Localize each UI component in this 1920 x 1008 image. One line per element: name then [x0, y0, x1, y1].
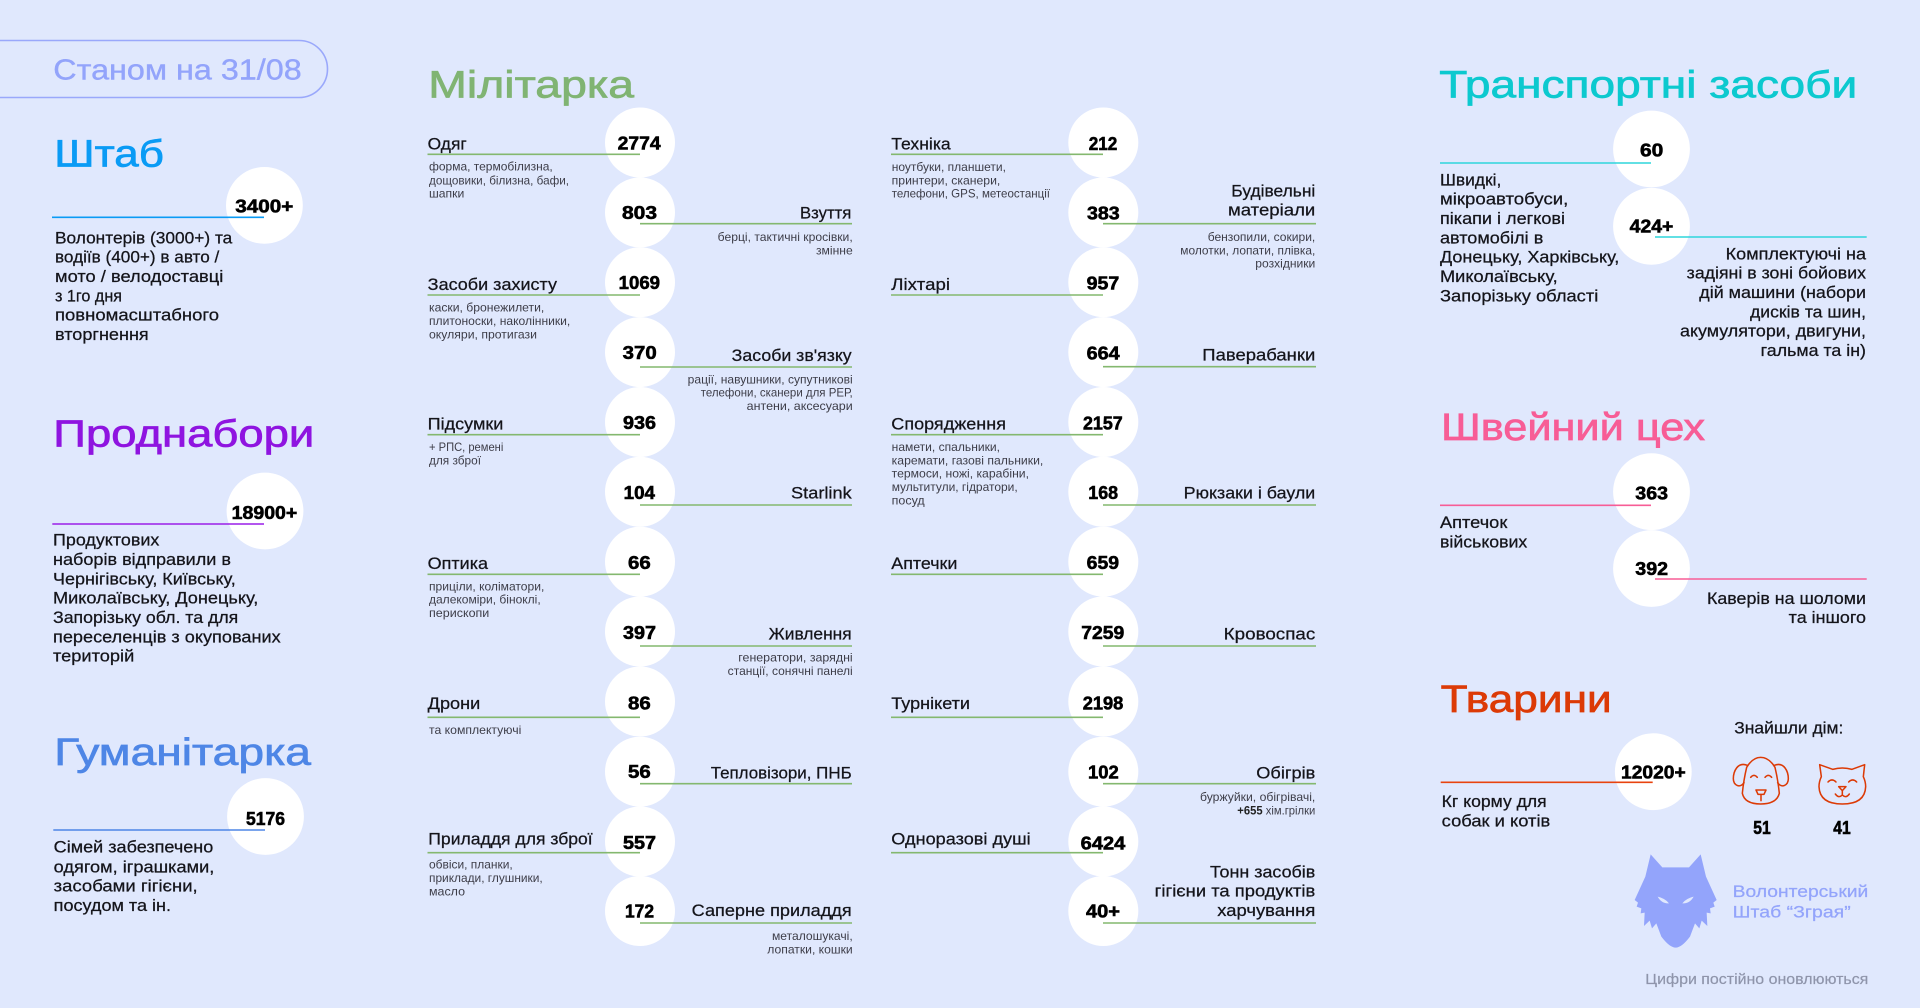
stat: 3400+ [52, 167, 303, 244]
stat: Приладдя для зброї 557: масло [429, 884, 465, 898]
stat: Тонн засобів гігієни 40+: гігієни та продуктів [1155, 882, 1315, 901]
stat: Оптика 66: приціли, коліматори, [429, 579, 544, 593]
panel: Транспортні засоби [1439, 65, 1867, 360]
stat: Спорядження 2157: Спорядження [891, 414, 1006, 433]
stat: Взуття 803: Взуття [800, 203, 851, 222]
stat: Кровоспас 7259: 7259 [1081, 622, 1124, 643]
stat: 392 helmet covers: та іншого [1789, 609, 1866, 627]
stat: 60 vehicles: автомобілі в [1440, 229, 1544, 247]
stat: Саперне приладдя 172 [605, 876, 853, 956]
heading: Гуманітарка: Гуманітарка [54, 732, 312, 774]
stat: Приладдя для зброї 557 [428, 806, 675, 898]
stat: 18900+ [52, 473, 303, 549]
stat: Техніка 212: Техніка [891, 134, 951, 153]
stat: Starlink 104: 104 [624, 482, 656, 503]
stat: Приладдя для зброї 557: обвіси, планки, [429, 858, 513, 872]
text: food kits: територій [53, 648, 134, 666]
stat: 12020+ kg feed: 12020+ [1621, 761, 1686, 782]
stat: Засоби захисту 1069: Засоби захисту [428, 275, 558, 294]
icon: cat [1819, 765, 1866, 804]
stat: Будівельні матеріали 383: молотки, лопати, плівка, [1180, 243, 1315, 257]
stat: Взуття 803: змінне [816, 243, 853, 257]
stat: Живлення 397: генератори, зарядні [738, 651, 853, 665]
text: volunteers: з 1го дня [55, 287, 122, 305]
stat: 60 vehicles: Запорізьку області [1440, 287, 1598, 305]
stat: Техніка 212: телефони, GPS, метеостанції [892, 187, 1051, 201]
text: families: одягом, іграшками, [54, 858, 214, 876]
text: volunteers: водіїв (400+) в авто / [55, 249, 220, 267]
stat: Живлення 397: Живлення [769, 624, 852, 643]
stat: Тонн засобів гігієни 40+: 40+ [1086, 901, 1120, 922]
stat: 60 vehicles: Миколаївську, [1440, 268, 1558, 286]
panel: Мілітарка [428, 64, 1316, 956]
heading: Мілітарка: Мілітарка [428, 64, 635, 106]
stat: Тонн засобів гігієни 40+: Тонн засобів [1210, 862, 1315, 881]
stat: Живлення 397: 397 [623, 622, 656, 643]
stat: 5176: 5176 [246, 808, 285, 829]
stat: Аптечки 659: 659 [1087, 552, 1119, 573]
stat: Техніка 212: принтери, сканери, [892, 173, 1000, 187]
text: volunteers: Волонтерів (3000+) та [55, 229, 233, 247]
date pill: Станом на 31/08 [53, 54, 302, 86]
heading: Транспортні засоби: Транспортні засоби [1439, 65, 1857, 107]
stat: Оптика 66: Оптика [428, 554, 489, 573]
stat: Рюкзаки і баули 168 [1068, 457, 1316, 527]
text: food kits [53, 532, 282, 666]
stat: Аптечки 659: Аптечки [891, 554, 957, 573]
text: volunteers: вторгнення [55, 326, 149, 344]
text: families: засобами гігієни, [54, 878, 198, 896]
stat: 392 helmet covers: Каверів на шоломи [1707, 590, 1866, 608]
stat: Обігрів 102 [1068, 737, 1316, 817]
stat: Засоби захисту 1069: каски, бронежилети, [429, 301, 544, 315]
stat: Будівельні матеріали 383: бензопили, сокири, [1208, 230, 1315, 244]
stat: Оптика 66: перископи [429, 606, 489, 620]
stat: Приладдя для зброї 557: Приладдя для зброї [428, 829, 593, 848]
stat: Паверабанки 664: 664 [1087, 342, 1120, 363]
text: families: Сімей забезпечено [54, 839, 213, 857]
heading: Швейний цех: Швейний цех [1441, 407, 1705, 449]
stat: Спорядження 2157 [891, 387, 1138, 507]
stat: Паверабанки 664: Паверабанки [1202, 345, 1315, 364]
text: volunteers: мото / велодоставці [55, 268, 223, 286]
stat: Ліхтарі 957: 957 [1087, 273, 1119, 294]
stat: Обігрів 102: +655 хім.грілки [1237, 803, 1315, 817]
stat: Взуття 803 [605, 177, 853, 257]
stat: Спорядження 2157: посуд [892, 493, 925, 507]
stat: 60 vehicles [1440, 111, 1690, 305]
text: food kits: наборів відправили в [53, 551, 231, 569]
stat: Турнікети 2198 [891, 666, 1138, 736]
stat: 424+ parts: гальма та ін) [1761, 342, 1866, 360]
stat: Ліхтарі 957: Ліхтарі [891, 275, 950, 294]
stat: Взуття 803: берці, тактичні кросівки, [718, 230, 853, 244]
stat: 363 first-aid kits [1440, 453, 1690, 551]
stat: Starlink 104 [605, 457, 852, 527]
stat: Кровоспас 7259: Кровоспас [1224, 624, 1316, 643]
stat: 12020+ kg feed: Кг корму для [1442, 793, 1547, 811]
stat: Кровоспас 7259 [1068, 596, 1316, 666]
stat: Оптика 66: далекоміри, біноклі, [429, 593, 541, 607]
stat: Техніка 212: 212 [1089, 133, 1117, 154]
stat: Техніка 212: ноутбуки, планшети, [892, 160, 1006, 174]
stat: 60 vehicles: 60 [1640, 140, 1663, 161]
panel: Проднабори [52, 414, 314, 666]
stat: Одноразові душі 6424 [891, 806, 1138, 876]
stat: Засоби зв'язку 370: телефони, сканери для РЕР, [701, 386, 853, 400]
logo: wordmark: Волонтерський [1733, 882, 1868, 901]
stat: Підсумки 936: 936 [623, 412, 656, 433]
stat: 5176 [53, 778, 304, 855]
panel: Швейний цех [1440, 407, 1867, 627]
stat: Саперне приладдя 172: 172 [625, 901, 654, 922]
stat: Засоби зв'язку 370: антени, аксесуари [747, 399, 853, 413]
stat: Спорядження 2157: намети, спальники, [892, 440, 1000, 454]
stat: Оптика 66: 66 [628, 552, 651, 573]
stat: 60 vehicles: Швидкі, [1440, 171, 1501, 189]
stat: Спорядження 2157: каремати, газові пальники, [892, 453, 1043, 467]
stat: 363 first-aid kits: Аптечок [1440, 514, 1508, 532]
stat: Приладдя для зброї 557: 557 [623, 832, 656, 853]
stat: Аптечки 659 [891, 527, 1138, 597]
stat: Саперне приладдя 172: металошукачі, [772, 929, 853, 943]
stat: Одноразові душі 6424: 6424 [1081, 832, 1126, 853]
stat: Взуття 803: 803 [622, 202, 657, 223]
stat: Саперне приладдя 172: лопатки, кошки [767, 942, 853, 956]
stat: Приладдя для зброї 557: приклади, глушники, [429, 871, 543, 885]
stat: Одяг 2774: дощовики, білизна, бафи, [429, 173, 569, 187]
text: food kits: переселенців з окупованих [53, 628, 282, 646]
stat: Будівельні матеріали 383: 383 [1087, 203, 1120, 224]
stat: Будівельні матеріали 383 [1068, 177, 1316, 271]
footnote: Цифри постійно оновлюються [1645, 972, 1868, 988]
stat: 363 first-aid kits: військових [1440, 533, 1528, 551]
text: food kits: Чернігівську, Київську, [53, 570, 236, 588]
panel: Тварини [1441, 679, 1866, 838]
stat: Ліхтарі 957 [891, 247, 1138, 317]
stat: Засоби захисту 1069: плитоноски, наколінники, [429, 314, 570, 328]
stat: 60 vehicles: пікапи і легкові [1440, 210, 1565, 228]
text: families [54, 839, 214, 915]
logo: wordmark: Штаб “Зграя” [1733, 903, 1851, 922]
stat: 18900+: 18900+ [232, 502, 298, 523]
text: food kits: Продуктових [53, 532, 160, 550]
stat: Засоби захисту 1069: 1069 [619, 272, 660, 293]
stat: Тепловізори, ПНБ 56: Тепловізори, ПНБ [711, 764, 852, 783]
stat: Рюкзаки і баули 168: Рюкзаки і баули [1184, 483, 1315, 502]
stat: Саперне приладдя 172: Саперне приладдя [692, 901, 852, 920]
stat: 12020+ kg feed [1441, 733, 1692, 830]
stat: 60 vehicles: мікроавтобуси, [1440, 191, 1568, 209]
stat: 12020+ kg feed: собак и котів [1442, 812, 1551, 830]
stat: Одяг 2774: форма, термобілизна, [429, 160, 553, 174]
stat: Засоби зв'язку 370: 370 [623, 342, 657, 363]
stat: 392 helmet covers [1613, 530, 1867, 627]
stat: Будівельні матеріали 383: Будівельні [1231, 181, 1315, 200]
stat: 424+ parts: 424+ [1630, 215, 1674, 236]
heading: Проднабори: Проднабори [53, 414, 314, 456]
stat: 3400+: 3400+ [235, 196, 294, 217]
stat: Одяг 2774: 2774 [618, 132, 661, 153]
text: food kits: Миколаївську, Донецьку, [53, 590, 258, 608]
stat: 424+ parts: дисків та шин, [1750, 303, 1866, 321]
stat: 392 helmet covers: 392 [1635, 558, 1668, 579]
stat: 424+ parts: акумулятори, двигуни, [1680, 323, 1866, 341]
date pill [0, 40, 328, 98]
stat: 60 vehicles: Донецьку, Харківську, [1440, 249, 1619, 267]
stat: Засоби зв'язку 370: Засоби зв'язку [732, 346, 852, 365]
stat: 424+ parts [1613, 188, 1867, 360]
logo: wolf mark [1635, 854, 1717, 948]
stat: Одноразові душі 6424: Одноразові душі [891, 829, 1031, 848]
stat: Оптика 66 [428, 527, 675, 620]
stat: Тонн засобів гігієни 40+ [1068, 862, 1316, 946]
stat: Дрони 86: 86 [628, 693, 651, 714]
stat: 424+ parts: дій машини (набори [1699, 284, 1866, 302]
stat: Тепловізори, ПНБ 56: 56 [628, 761, 651, 782]
stat: Засоби захисту 1069: окуляри, протигази [429, 328, 537, 342]
text: food kits: Запорізьку обл. та для [53, 609, 238, 627]
panel: Штаб [52, 134, 303, 344]
stat: Засоби зв'язку 370: рації, навушники, супутникові [688, 372, 853, 386]
stat: Техніка 212 [891, 108, 1138, 201]
caption: found home: Знайшли дім: [1734, 719, 1843, 737]
stat: Starlink 104: Starlink [791, 483, 852, 502]
stat: Обігрів 102: Обігрів [1256, 764, 1315, 783]
icon: dog [1733, 757, 1788, 804]
stat: Будівельні матеріали 383: розхідники [1255, 257, 1315, 271]
stat: Спорядження 2157: 2157 [1083, 412, 1123, 433]
stat: Турнікети 2198: 2198 [1083, 693, 1123, 714]
stat: Підсумки 936 [428, 387, 675, 467]
stat: Живлення 397: станції, сонячні панелі [728, 664, 853, 678]
stat: Спорядження 2157: термоси, ножі, карабіни, [892, 467, 1029, 481]
stat: 424+ parts: Комплектуючі на [1726, 245, 1867, 263]
stat: Дрони 86: та комплектуючі [429, 723, 521, 737]
stat: 363 first-aid kits: 363 [1635, 483, 1668, 504]
stat: Одяг 2774: Одяг [428, 134, 467, 153]
panel: Гуманітарка [53, 732, 312, 915]
stat: Обігрів 102: 102 [1088, 761, 1119, 782]
stat: Спорядження 2157: мультитули, гідратори, [892, 480, 1018, 494]
text: volunteers: повномасштабного [55, 307, 219, 325]
stat: Рюкзаки і баули 168: 168 [1088, 482, 1118, 503]
stat: Турнікети 2198: Турнікети [891, 694, 970, 713]
stat: Дрони 86 [428, 666, 675, 737]
stat: Засоби захисту 1069 [428, 247, 675, 342]
stat: Засоби зв'язку 370 [605, 317, 853, 413]
number: dogs: 51 [1753, 817, 1771, 838]
stat: Тепловізори, ПНБ 56 [605, 737, 852, 807]
heading: Тварини: Тварини [1441, 679, 1612, 721]
stat: Підсумки 936: для зброї [429, 453, 482, 467]
stat: Будівельні матеріали 383: матеріали [1228, 201, 1315, 220]
stat: Підсумки 936: + РПС, ремені [429, 440, 503, 454]
stat: Обігрів 102: буржуйки, обігрівачі, [1200, 790, 1315, 804]
stat: Одяг 2774: шапки [429, 187, 464, 201]
stat: Підсумки 936: Підсумки [428, 414, 503, 433]
stat: Одяг 2774 [428, 108, 675, 201]
number: cats: 41 [1833, 817, 1851, 838]
stat: Тонн засобів гігієни 40+: харчування [1217, 901, 1315, 920]
logo: wordmark [1733, 882, 1868, 922]
heading: Штаб: Штаб [54, 134, 164, 176]
stat: Живлення 397 [605, 596, 853, 678]
stat: Дрони 86: Дрони [428, 694, 480, 713]
stat: Паверабанки 664 [1068, 317, 1316, 387]
text: families: посудом та ін. [54, 897, 171, 915]
text: volunteers [55, 229, 233, 344]
stat: 424+ parts: задіяні в зоні бойових [1687, 265, 1867, 283]
